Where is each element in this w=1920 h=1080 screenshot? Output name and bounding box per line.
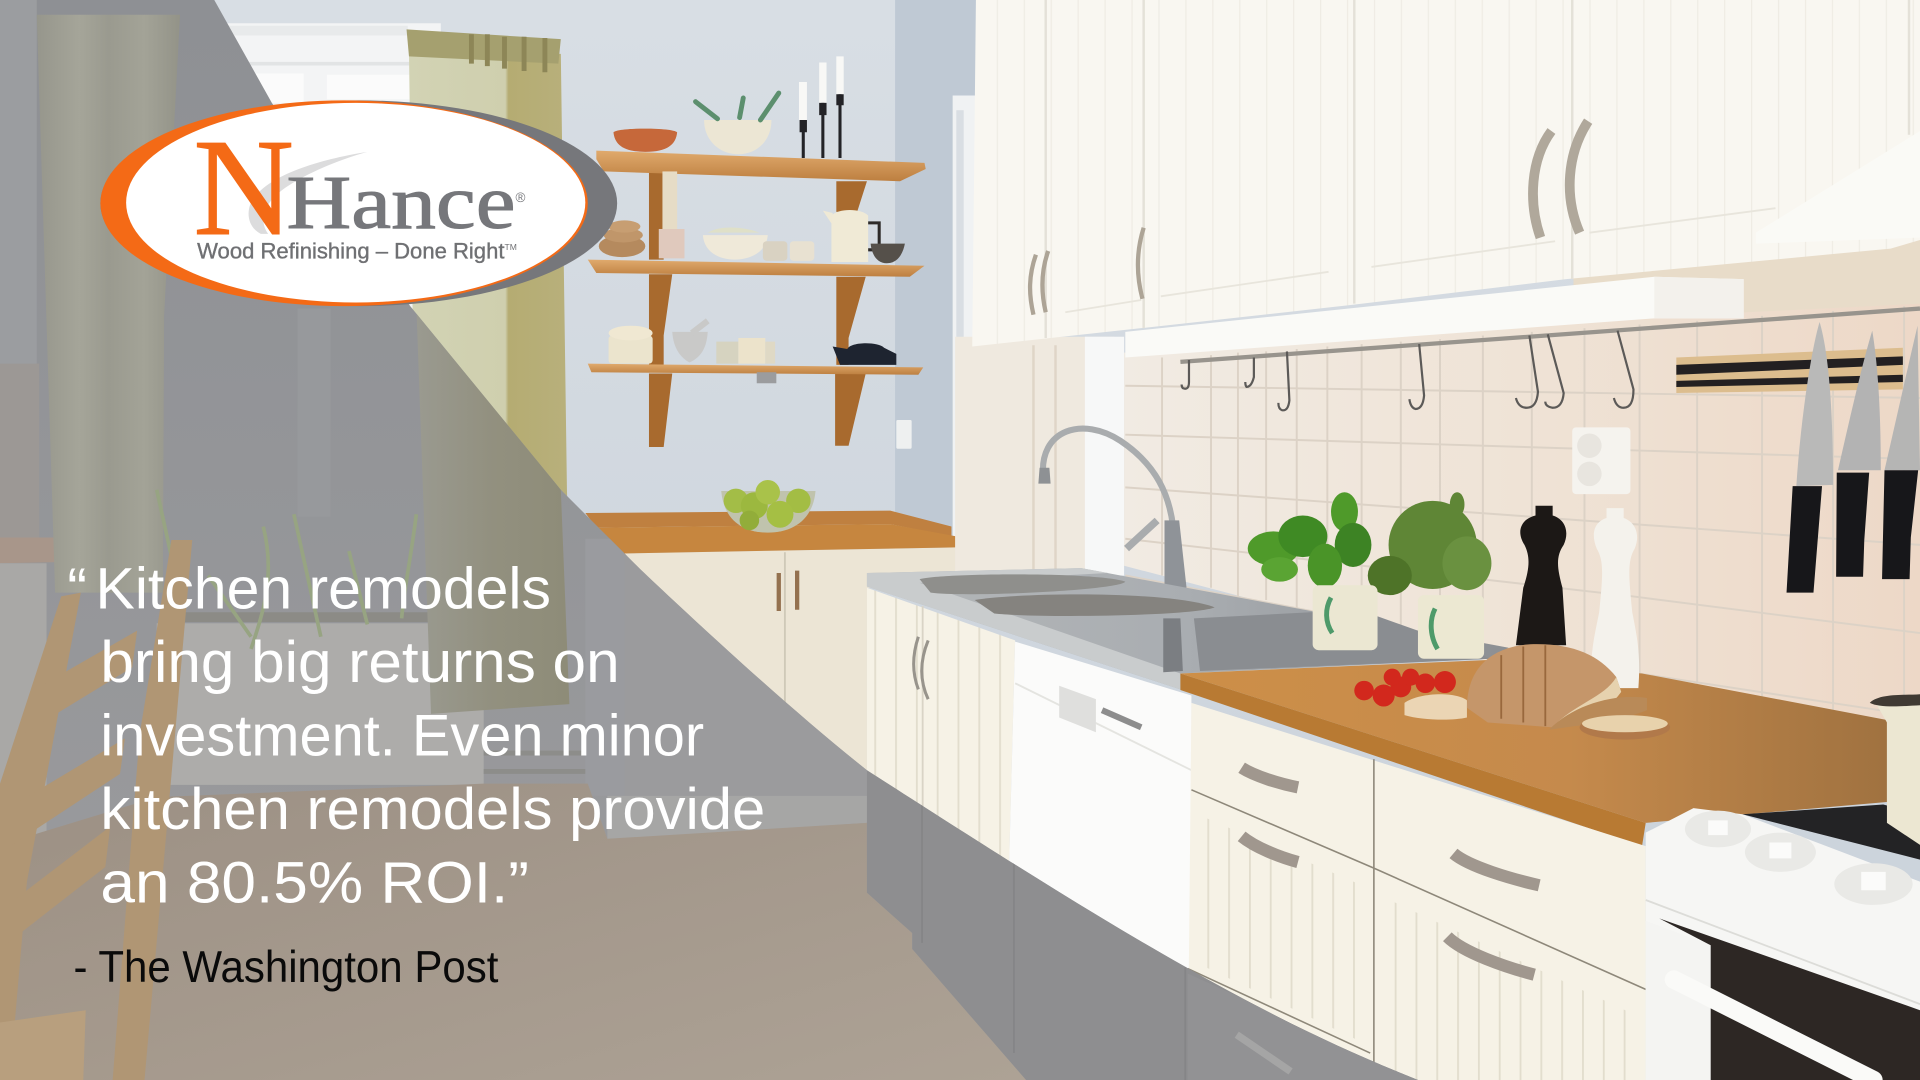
wall socket [1572,427,1630,494]
floor [0,784,1026,1080]
chair slats [22,630,137,931]
tiled backsplash [1124,239,1920,747]
middle shelf [588,260,924,277]
plants under the window [157,490,416,649]
tomatoes and bread [1354,644,1670,740]
under-cabinet light strip [1125,277,1744,358]
corner cabinet plinth [607,796,867,840]
logo letter N: N [193,111,294,264]
bowl of apples [721,480,816,533]
pipes by the radiator [484,753,588,771]
sink cabinet [867,588,1015,869]
wooden chairs [0,540,192,1080]
pot [1870,694,1920,845]
wall shelves [588,151,926,447]
middle curtain in overlay [416,306,569,714]
upper cabinets [972,0,1920,347]
wooden countertop [1180,660,1887,846]
overlaid corner cabinet doors [624,554,867,770]
quote attribution: - The Washington Post [73,943,498,992]
left wall pillar [0,0,37,367]
cabinet handles [1030,228,1144,315]
radiator [157,612,484,785]
door frame [953,96,977,561]
logo: N-Hance oval [100,100,617,306]
drawer handles [1242,768,1539,975]
corner base cabinet [585,511,956,808]
overlaid corner wood counter [606,535,626,555]
chair posts [0,592,81,1022]
shelf brackets [649,171,867,447]
quote line 5: an 80.5% ROI.” [100,850,529,915]
hanging rail and hooks [1180,309,1920,410]
doorway beyond the sink [955,337,1124,576]
counter top surface [1180,660,1887,823]
outlet [896,420,912,449]
left curtain in overlay [37,15,180,593]
registered mark: ® [516,190,526,205]
stove [1646,804,1920,1080]
shelf items [599,56,905,383]
overlaid corner cabinet wall [585,539,624,796]
top shelf [596,151,926,181]
drawer fronts [1188,703,1646,1080]
quote line 1: Kitchen remodels [96,557,551,622]
quote text [67,557,765,915]
quote line 2: bring big returns on [100,630,620,695]
herb pots [1248,492,1491,659]
grey diagonal overlay panel [0,0,1418,1080]
magnetic knife strip [1676,348,1903,393]
base cabinets [867,588,1646,1080]
faint window column [298,309,331,517]
middle curtain [407,29,569,576]
pepper mills [1516,506,1639,688]
dishwasher [1009,642,1191,980]
steel countertop and sink [867,568,1509,689]
faucet [1038,429,1187,588]
logo swoosh [249,152,367,234]
range hood [1756,131,1920,244]
counter splash [585,511,951,536]
kitchen cabinets in overlay [867,759,1433,1080]
logo wordmark Hance: Hance [287,161,516,245]
bottom shelf [588,364,923,375]
logo grey outer oval [100,100,617,306]
counter front edge [1180,673,1646,846]
quote line 3: investment. Even minor [100,704,704,769]
window [159,23,441,391]
corner counter top [596,524,956,553]
opening quotation mark: “ [67,557,87,622]
side cabinet at far left [0,364,54,834]
quote line 4: kitchen remodels provide [100,777,765,842]
thyme [1368,492,1491,595]
knives [1787,322,1920,593]
overlay base tone [0,0,1418,1080]
basil [1248,492,1371,588]
chair seat [0,1010,86,1080]
logo orange oval [100,100,588,306]
logo white center [126,103,585,302]
logo tagline: Wood Refinishing – Done Right [197,238,504,263]
trademark: TM [504,242,517,252]
